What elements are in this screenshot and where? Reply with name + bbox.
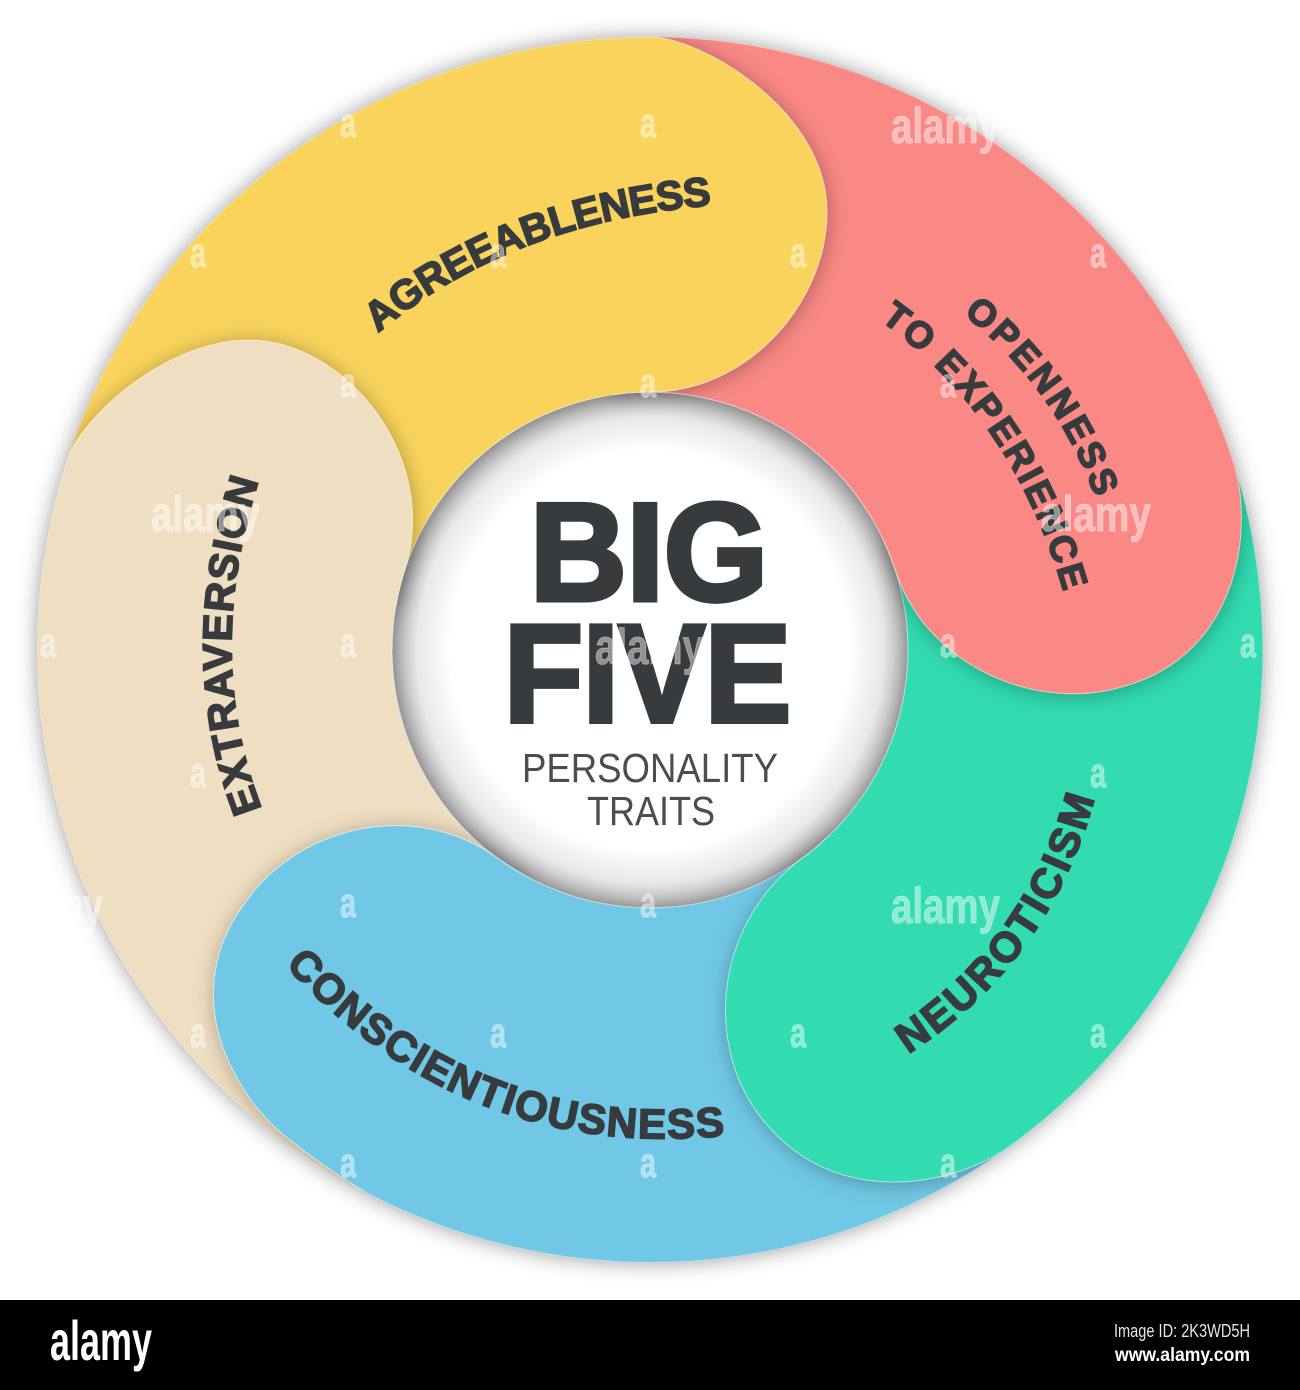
watermarks: alamy (595, 619, 704, 675)
small watermark marks: a (340, 99, 356, 146)
small watermark marks: a (640, 99, 656, 146)
small watermark marks: a (640, 359, 656, 406)
small watermark marks (40, 99, 1256, 1186)
small watermark marks: a (790, 749, 806, 796)
subtitle: personality traits (522, 745, 778, 834)
panel: agreeableness petal (46, 43, 696, 611)
small watermark marks: a (640, 879, 656, 926)
panel: openness petal (565, 37, 1241, 694)
watermarks: alamy (891, 98, 1000, 154)
small watermark marks: a (340, 1139, 356, 1186)
watermarks: alamy (151, 486, 260, 542)
panel: extraversion petal (37, 340, 529, 1191)
small watermark marks: a (790, 229, 806, 276)
small watermark marks: a (340, 619, 356, 666)
title: big five: BIG (530, 475, 768, 630)
small watermark marks: a (190, 229, 206, 276)
small watermark marks: a (790, 1009, 806, 1056)
watermarks (0, 98, 1151, 934)
watermarks: alamy (0, 878, 103, 934)
small watermark marks: a (40, 619, 56, 666)
label: agreeableness: AGREEABLENESS (368, 177, 710, 334)
footer bar (0, 1300, 1300, 1390)
small watermark marks: a (1090, 749, 1106, 796)
small watermark marks: a (490, 1009, 506, 1056)
small watermark marks: a (190, 749, 206, 796)
watermarks: alamy (1041, 486, 1151, 542)
watermarks: alamy (891, 878, 1000, 934)
small watermark marks: a (640, 1139, 656, 1186)
footer logo: alamy (50, 1309, 152, 1372)
panel: agreeableness lobe on top of openness (396, 37, 840, 411)
subtitle: personality traits: PERSONALITY (522, 745, 778, 791)
label: neuroticism: NEUROTICISM (893, 792, 1095, 1054)
small watermark marks: a (340, 359, 356, 406)
subtitle: personality traits: TRAITS (587, 788, 715, 834)
center circle (388, 388, 912, 912)
label: openness: OPENNESS (968, 298, 1118, 495)
panel: conscientiousness petal (213, 826, 1076, 1263)
footer image id: Image ID: 2K3WD5H (1114, 1321, 1250, 1341)
title: big five (504, 475, 791, 752)
small watermark marks: a (940, 359, 956, 406)
title: big five: FIVE (504, 596, 791, 752)
small watermark marks: a (490, 229, 506, 276)
footer url: www.alamy.com (1114, 1345, 1250, 1366)
small watermark marks: a (1090, 229, 1106, 276)
small watermark marks: a (940, 619, 956, 666)
label: conscientiousness: CONSCIENTIOUSNESS (290, 950, 724, 1140)
label: to experience: TO EXPERIENCE (886, 298, 1088, 592)
small watermark marks: a (940, 1139, 956, 1186)
small watermark marks: a (340, 879, 356, 926)
small watermark marks: a (1240, 619, 1256, 666)
small watermark marks: a (1090, 1009, 1106, 1056)
label: extraversion: EXTRAVERSION (202, 474, 262, 817)
panel: neuroticism petal (725, 381, 1263, 1182)
small watermark marks: a (190, 1009, 206, 1056)
